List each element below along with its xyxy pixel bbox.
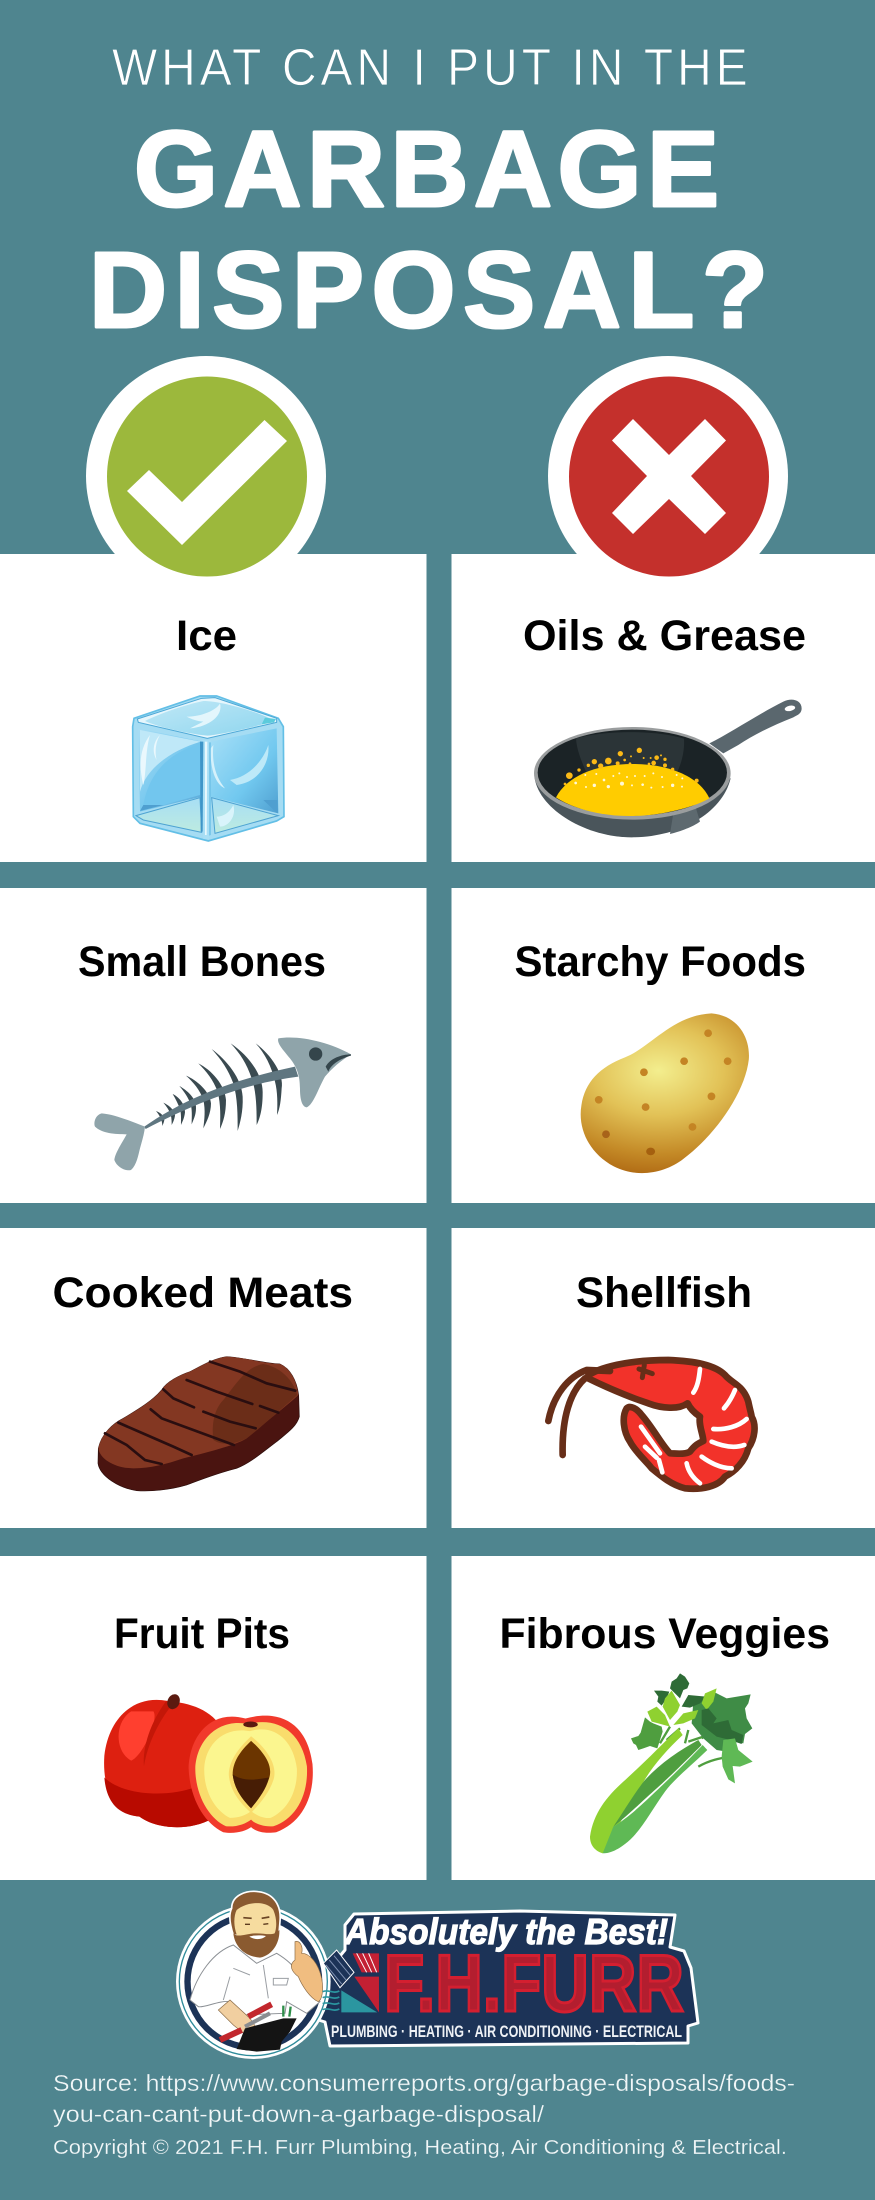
title <box>89 38 768 350</box>
logo: company name: F.H.FURR <box>384 1939 684 2029</box>
icon: red cross badge outer ring <box>548 356 788 596</box>
icon: ice cube <box>133 696 284 841</box>
logo: services: PLUMBING · HEATING · AIR CONDITIONING · ELECTRICAL <box>331 2022 682 2041</box>
icon: red cross badge <box>569 376 769 576</box>
logo: tagline: Absolutely the Best! <box>344 1911 668 1952</box>
source citation <box>53 2070 795 2127</box>
label: small bones: Small Bones <box>78 938 326 986</box>
panel: oils and grease <box>452 554 875 862</box>
icon: grilled steak <box>98 1357 299 1491</box>
label: fruit pits: Fruit Pits <box>114 1610 290 1658</box>
icon: green check badge outer ring <box>86 356 326 596</box>
icon: halved peach <box>104 1693 313 1833</box>
icon: shrimp <box>548 1360 755 1489</box>
panel: ice <box>0 554 426 862</box>
icon: fish skeleton <box>94 1037 351 1170</box>
heading word: garbage: GARBAGE <box>134 108 719 229</box>
label: starchy foods: Starchy Foods <box>514 938 806 986</box>
panel: small bones <box>0 888 426 1203</box>
source citation: Source: https://www.consumerreports.org/garbage-disposals/foods- <box>53 2070 795 2096</box>
subtitle line: WHAT CAN I PUT IN THE <box>112 38 748 96</box>
panel: fibrous veggies <box>452 1556 875 1880</box>
icon: green check badge <box>107 376 307 576</box>
source citation: you-can-cant-put-down-a-garbage-disposal/ <box>53 2101 545 2127</box>
logo: F.H. Furr <box>176 1891 698 2059</box>
logo: banner background <box>312 1911 698 2046</box>
icon: celery <box>590 1673 753 1853</box>
label: cooked meats: Cooked Meats <box>52 1269 353 1317</box>
icon: potato <box>581 1013 749 1173</box>
panel: shellfish <box>452 1228 875 1528</box>
heading word: disposal: DISPOSAL? <box>89 229 768 350</box>
label: ice: Ice <box>176 612 237 660</box>
label: fibrous veggies: Fibrous Veggies <box>500 1610 830 1658</box>
logo: HVAC icon <box>323 1950 379 2012</box>
panel: fruit pits <box>0 1556 426 1880</box>
panel: starchy foods <box>452 888 875 1203</box>
logo: mascot badge <box>176 1891 331 2059</box>
panel: cooked meats <box>0 1228 426 1528</box>
icon: frying pan with oil <box>534 700 802 837</box>
label: oils and grease: Oils & Grease <box>523 612 806 660</box>
copyright: Copyright © 2021 F.H. Furr Plumbing, Heating, Air Conditioning & Electrical. <box>53 2137 787 2159</box>
label: shellfish: Shellfish <box>576 1269 752 1317</box>
